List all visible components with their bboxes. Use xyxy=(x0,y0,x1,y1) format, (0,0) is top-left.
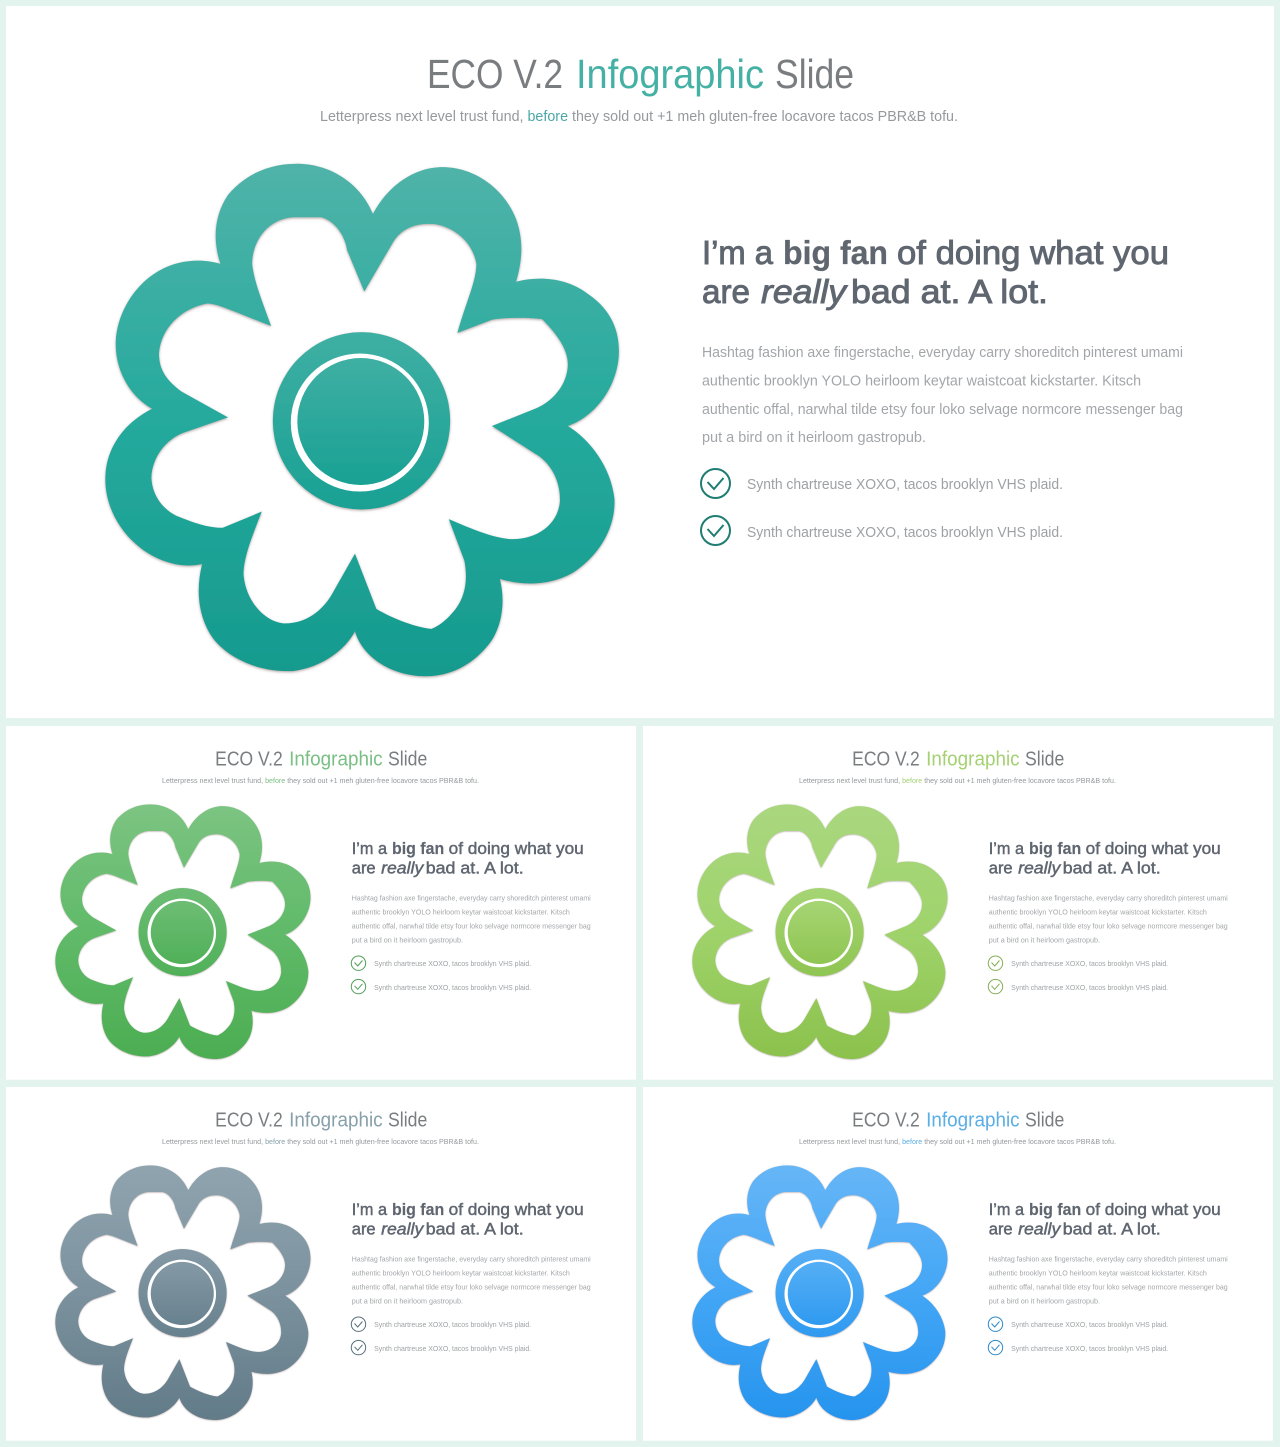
title: ECO V.2 xyxy=(215,1110,283,1132)
body text: authentic brooklyn YOLO heirloom keytar waistcoat kickstarter. Kitsch xyxy=(702,374,1141,390)
body text: authentic brooklyn YOLO heirloom keytar waistcoat kickstarter. Kitsch xyxy=(352,908,570,917)
heading: big fan xyxy=(1029,1201,1081,1219)
title: Slide xyxy=(388,1110,427,1132)
body text xyxy=(352,1254,591,1306)
check item 2: Synth chartreuse XOXO, tacos brooklyn VHS plaid. xyxy=(374,983,531,992)
title xyxy=(427,51,854,97)
heading xyxy=(352,1201,584,1239)
body text: put a bird on it heirloom gastropub. xyxy=(352,936,463,945)
check item 1 xyxy=(701,469,1063,498)
body text xyxy=(989,893,1228,945)
subtitle: Letterpress next level trust fund, before they sold out +1 meh gluten-free locavore tacos PBR&B tofu. xyxy=(799,776,1116,785)
check item 2 xyxy=(988,1340,1168,1355)
title: Infographic xyxy=(576,51,764,97)
body text: Hashtag fashion axe fingerstache, everyday carry shoreditch pinterest umami xyxy=(989,1254,1228,1263)
body text: Hashtag fashion axe fingerstache, everyday carry shoreditch pinterest umami xyxy=(352,1254,591,1263)
panel: teal slide xyxy=(6,6,1274,718)
heading: of doing what you xyxy=(897,234,1169,271)
title: Slide xyxy=(1025,749,1064,771)
heading xyxy=(352,840,584,878)
check item 2 xyxy=(701,516,1063,545)
heading xyxy=(989,1201,1221,1239)
check item 2: Synth chartreuse XOXO, tacos brooklyn VHS plaid. xyxy=(1011,1344,1168,1353)
check item 2 xyxy=(351,979,531,994)
title: Slide xyxy=(388,749,427,771)
heading: really xyxy=(1018,860,1062,878)
body text: Hashtag fashion axe fingerstache, everyday carry shoreditch pinterest umami xyxy=(352,893,591,902)
check item 1 xyxy=(351,956,531,970)
icon: flower xyxy=(55,804,310,1059)
body text: put a bird on it heirloom gastropub. xyxy=(989,1297,1100,1306)
heading: really xyxy=(381,1221,425,1239)
panel: grey slide xyxy=(6,1087,636,1441)
body text: authentic brooklyn YOLO heirloom keytar waistcoat kickstarter. Kitsch xyxy=(352,1269,570,1278)
body text: put a bird on it heirloom gastropub. xyxy=(702,430,926,446)
title: Infographic xyxy=(926,1110,1020,1132)
body text: authentic offal, narwhal tilde etsy four loko selvage normcore messenger bag xyxy=(352,922,591,931)
title: ECO V.2 xyxy=(852,1110,920,1132)
heading xyxy=(989,840,1221,878)
check item 2 xyxy=(988,979,1168,994)
check item 1 xyxy=(351,1317,531,1331)
heading: are xyxy=(989,860,1013,878)
heading: are xyxy=(702,273,750,310)
title: Infographic xyxy=(289,749,383,771)
heading xyxy=(702,234,1169,310)
title: Slide xyxy=(1025,1110,1064,1132)
check item 2: Synth chartreuse XOXO, tacos brooklyn VHS plaid. xyxy=(374,1344,531,1353)
heading: I’m a xyxy=(352,840,388,858)
icon: flower xyxy=(105,164,619,676)
check item 1: Synth chartreuse XOXO, tacos brooklyn VHS plaid. xyxy=(1011,1320,1168,1329)
body text: Hashtag fashion axe fingerstache, everyday carry shoreditch pinterest umami xyxy=(989,893,1228,902)
heading: really xyxy=(381,860,425,878)
heading: of doing what you xyxy=(449,1201,584,1219)
heading: bad at. A lot. xyxy=(426,1221,524,1239)
heading: are xyxy=(352,1221,376,1239)
heading: are xyxy=(989,1221,1013,1239)
heading: of doing what you xyxy=(1086,1201,1221,1219)
title xyxy=(852,1110,1064,1132)
heading: big fan xyxy=(1029,840,1081,858)
heading: really xyxy=(1018,1221,1062,1239)
icon: flower xyxy=(692,1165,947,1420)
subtitle: Letterpress next level trust fund, before they sold out +1 meh gluten-free locavore tacos PBR&B tofu. xyxy=(162,1137,479,1146)
body text: authentic brooklyn YOLO heirloom keytar waistcoat kickstarter. Kitsch xyxy=(989,908,1207,917)
heading: big fan xyxy=(783,234,888,271)
heading: are xyxy=(352,860,376,878)
icon: flower xyxy=(692,804,947,1059)
body text: authentic offal, narwhal tilde etsy four loko selvage normcore messenger bag xyxy=(702,402,1183,418)
body text: authentic offal, narwhal tilde etsy four loko selvage normcore messenger bag xyxy=(352,1283,591,1292)
heading: I’m a xyxy=(702,234,774,271)
body text xyxy=(702,345,1183,446)
heading: bad at. A lot. xyxy=(426,860,524,878)
title: Slide xyxy=(775,51,854,97)
heading: I’m a xyxy=(989,840,1025,858)
check item 1 xyxy=(988,956,1168,970)
heading: I’m a xyxy=(989,1201,1025,1219)
subtitle: Letterpress next level trust fund, before they sold out +1 meh gluten-free locavore tacos PBR&B tofu. xyxy=(162,776,479,785)
heading: bad at. A lot. xyxy=(851,273,1048,310)
title: ECO V.2 xyxy=(852,749,920,771)
body text: authentic brooklyn YOLO heirloom keytar waistcoat kickstarter. Kitsch xyxy=(989,1269,1207,1278)
body text xyxy=(989,1254,1228,1306)
heading: bad at. A lot. xyxy=(1063,1221,1161,1239)
heading: I’m a xyxy=(352,1201,388,1219)
panel: green slide xyxy=(6,726,636,1080)
subtitle: Letterpress next level trust fund, before they sold out +1 meh gluten-free locavore tacos PBR&B tofu. xyxy=(320,109,958,125)
body text: authentic offal, narwhal tilde etsy four loko selvage normcore messenger bag xyxy=(989,922,1228,931)
body text xyxy=(352,893,591,945)
title: Infographic xyxy=(926,749,1020,771)
check item 2: Synth chartreuse XOXO, tacos brooklyn VHS plaid. xyxy=(1011,983,1168,992)
heading: really xyxy=(761,273,849,310)
check item 2: Synth chartreuse XOXO, tacos brooklyn VHS plaid. xyxy=(747,525,1063,541)
heading: of doing what you xyxy=(1086,840,1221,858)
check item 1: Synth chartreuse XOXO, tacos brooklyn VHS plaid. xyxy=(747,477,1063,493)
title xyxy=(215,1110,427,1132)
title: ECO V.2 xyxy=(427,51,563,97)
check item 1: Synth chartreuse XOXO, tacos brooklyn VHS plaid. xyxy=(374,1320,531,1329)
check item 1: Synth chartreuse XOXO, tacos brooklyn VHS plaid. xyxy=(374,959,531,968)
title: Infographic xyxy=(289,1110,383,1132)
check item 2 xyxy=(351,1340,531,1355)
panel: blue slide xyxy=(643,1087,1273,1441)
heading: big fan xyxy=(392,840,444,858)
body text: put a bird on it heirloom gastropub. xyxy=(989,936,1100,945)
title xyxy=(215,749,427,771)
check item 1 xyxy=(988,1317,1168,1331)
body text: put a bird on it heirloom gastropub. xyxy=(352,1297,463,1306)
title xyxy=(852,749,1064,771)
check item 1: Synth chartreuse XOXO, tacos brooklyn VHS plaid. xyxy=(1011,959,1168,968)
heading: of doing what you xyxy=(449,840,584,858)
subtitle: Letterpress next level trust fund, before they sold out +1 meh gluten-free locavore tacos PBR&B tofu. xyxy=(799,1137,1116,1146)
panel: lime slide xyxy=(643,726,1273,1080)
icon: flower xyxy=(55,1165,310,1420)
title: ECO V.2 xyxy=(215,749,283,771)
body text: Hashtag fashion axe fingerstache, everyday carry shoreditch pinterest umami xyxy=(702,345,1183,361)
heading: bad at. A lot. xyxy=(1063,860,1161,878)
heading: big fan xyxy=(392,1201,444,1219)
body text: authentic offal, narwhal tilde etsy four loko selvage normcore messenger bag xyxy=(989,1283,1228,1292)
